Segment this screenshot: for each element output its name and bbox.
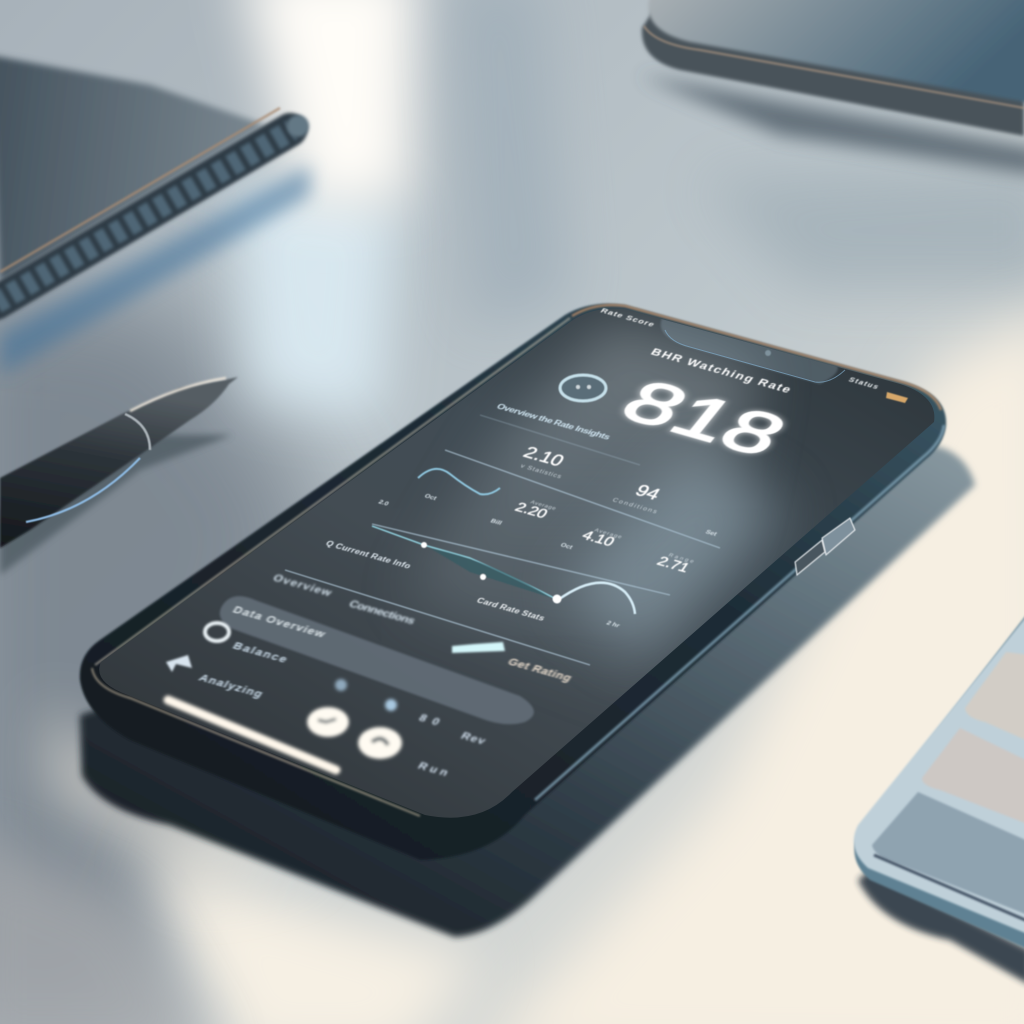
section labels (270, 573, 417, 627)
small sparkline chart (418, 469, 500, 494)
small axis labels: Set (704, 529, 719, 538)
right label: Get Rating (505, 657, 574, 684)
section labels: Connections (346, 599, 417, 627)
list item with arrow icon (166, 655, 265, 700)
stat 2.10: 2.10 (520, 443, 568, 470)
pill row (220, 596, 534, 724)
status bar right: Status (847, 376, 880, 391)
stat 2.20: Average (529, 500, 557, 512)
main line chart (372, 526, 635, 614)
big metric glow: 818 (607, 368, 801, 469)
camera dot (765, 350, 771, 356)
phone top edge glow (572, 305, 941, 410)
phone left edge glow (95, 318, 570, 665)
tablet (640, 0, 1024, 175)
round white buttons (307, 707, 402, 759)
keyboard corner (854, 610, 1024, 985)
notebook (0, 55, 310, 375)
screen reflections and UI (285, 318, 845, 700)
small axis labels (377, 493, 719, 629)
stat 94 (611, 481, 664, 515)
big metric value: 818 (607, 368, 801, 469)
stat 2.71: 2.71 (654, 554, 693, 575)
list item with arrow icon: Analyzing (196, 673, 265, 700)
cyan bar (452, 642, 505, 653)
stat 2.71: Range (667, 553, 695, 565)
small axis labels: Oct (423, 493, 439, 502)
stat 94: 94 (632, 481, 664, 503)
pill row: Data Overview (230, 605, 327, 640)
small dots (335, 679, 397, 711)
notch outline (665, 330, 845, 382)
small axis labels: Oct (559, 542, 575, 551)
small bottom labels (415, 713, 488, 779)
stat 4.10: 4.10 (579, 528, 618, 549)
header: rate title: BHR Watching Rate (648, 346, 794, 396)
stat 2.20: 2.20 (512, 500, 551, 521)
phone body (80, 304, 946, 860)
screen (99, 309, 934, 818)
phone cast shadow (80, 445, 975, 937)
small axis labels: 2 hr (605, 620, 621, 629)
stat 2.10: v Statistics (519, 463, 563, 480)
small bottom labels: Rev (458, 731, 488, 747)
home bar (168, 700, 336, 770)
side buttons (795, 518, 855, 575)
status bar left: Rate Score (599, 306, 657, 328)
small axis labels: Bill (489, 518, 503, 527)
divider lines (285, 415, 720, 665)
pen (0, 377, 238, 575)
list label row: Q Current Rate Info (324, 539, 413, 570)
list item with ring icon (205, 623, 289, 665)
chart caption: Card Rate Stats (475, 596, 547, 623)
section labels: Overview (270, 573, 334, 599)
phone bottom edge glow (92, 668, 420, 816)
circular icon (560, 375, 606, 401)
smartphone (80, 304, 946, 860)
stat 94: Conditions (611, 497, 659, 515)
notch (661, 318, 838, 384)
small axis labels: 2.0 (377, 499, 390, 507)
list item with ring icon: Balance (230, 641, 289, 665)
subtitle: Overview the Rate Insights (495, 402, 612, 441)
battery icon (886, 392, 908, 403)
small bottom labels: 80 (416, 713, 442, 728)
small bottom labels: Run (415, 761, 450, 779)
phone edge highlight (535, 425, 944, 800)
stat 4.10: Average (593, 528, 623, 540)
